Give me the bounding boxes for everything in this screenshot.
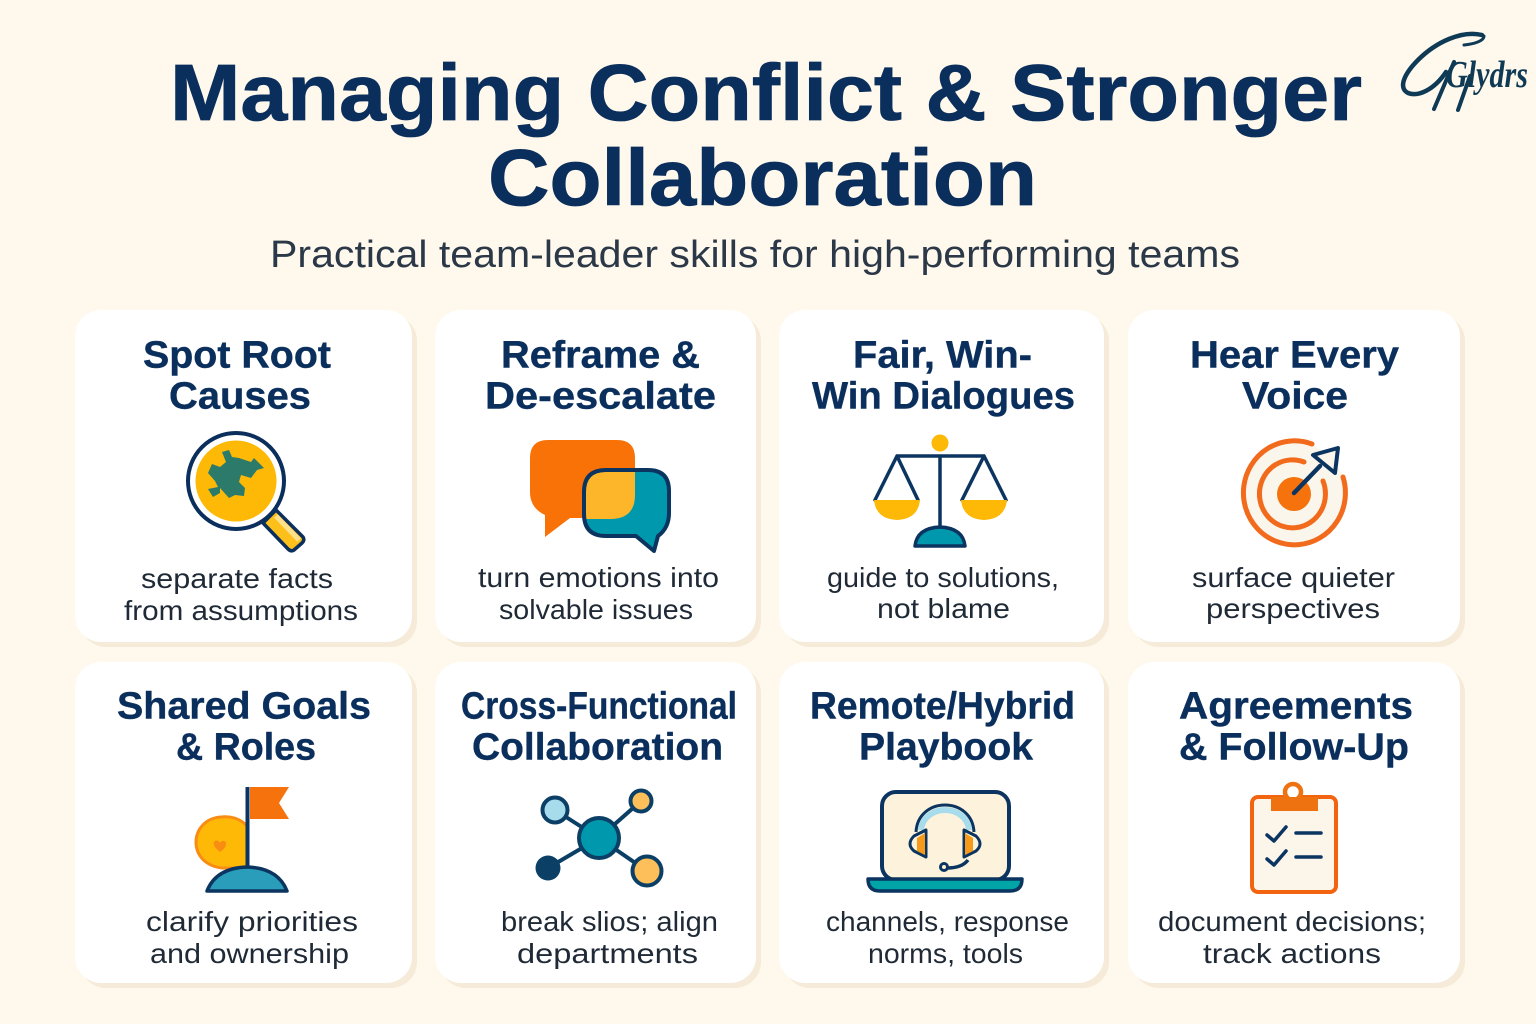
- heading: & Roles: [176, 726, 316, 768]
- heading: Causes: [169, 376, 311, 418]
- heading: [812, 334, 1075, 418]
- icon: overlapping speech bubbles: [530, 440, 669, 551]
- heading: Cross-Functional: [461, 686, 737, 728]
- description: perspectives: [1206, 593, 1380, 624]
- panel: Fair, Win-Win Dialogues: [779, 310, 1109, 647]
- description: surface quieter: [1192, 562, 1395, 593]
- title: Managing Conflict & Stronger: [170, 48, 1362, 137]
- heading: Hear Every: [1190, 334, 1399, 376]
- icon: target with arrow: [1242, 441, 1346, 546]
- heading: Playbook: [859, 726, 1034, 768]
- description: document decisions;: [1158, 906, 1426, 937]
- heading: Shared Goals: [117, 686, 371, 728]
- heading: [810, 686, 1075, 768]
- description: channels, response: [826, 906, 1069, 937]
- heading: Voice: [1242, 376, 1348, 418]
- description: solvable issues: [499, 594, 693, 625]
- heading: [143, 334, 331, 418]
- heading: & Follow-Up: [1179, 726, 1409, 768]
- description: track actions: [1203, 938, 1381, 969]
- description: [501, 906, 718, 969]
- description: [1192, 562, 1395, 624]
- heading: [1190, 334, 1399, 418]
- description: break slios; align: [501, 906, 718, 937]
- card background: [1128, 662, 1460, 983]
- panel: Agreements & Follow-Up: [1128, 662, 1465, 988]
- heading: Win Dialogues: [812, 376, 1075, 418]
- logo: Glydrs: [1403, 34, 1528, 110]
- card background: [75, 662, 412, 983]
- card background: [779, 662, 1104, 983]
- description: [146, 906, 358, 969]
- description: guide to solutions,: [827, 562, 1059, 593]
- panel: Hear Every Voice: [1128, 310, 1465, 647]
- description: and ownership: [150, 938, 349, 969]
- card background: [779, 310, 1104, 642]
- description: not blame: [877, 593, 1010, 624]
- icon: clipboard checklist: [1252, 784, 1336, 892]
- card background: [435, 662, 756, 983]
- description: norms, tools: [868, 938, 1023, 969]
- heading: Fair, Win-: [853, 334, 1032, 376]
- card background: [435, 310, 756, 642]
- heading: Remote/Hybrid: [810, 686, 1075, 728]
- icon: magnifying glass with puzzle piece: [188, 433, 304, 551]
- card background: [1128, 310, 1460, 642]
- heading: [485, 334, 716, 418]
- panel: Reframe & De-escalate: [435, 310, 761, 647]
- description: [1158, 906, 1426, 969]
- description: turn emotions into: [478, 562, 719, 593]
- heading: [1179, 686, 1413, 768]
- description: [124, 563, 358, 626]
- icon: flag on mound with coin: [196, 787, 289, 891]
- title: Collaboration: [488, 133, 1037, 222]
- panel: Cross-Functional Collaboration: [435, 662, 761, 988]
- description: [826, 906, 1069, 969]
- description: departments: [517, 938, 698, 969]
- heading: Reframe &: [501, 334, 700, 376]
- description: separate facts: [141, 563, 333, 594]
- icon: balance scales: [874, 434, 1007, 546]
- subtitle: Practical team-leader skills for high-performing teams: [270, 234, 1240, 276]
- card background: [75, 310, 412, 642]
- icon: network of nodes: [536, 790, 662, 886]
- panel: Remote/Hybrid Playbook: [779, 662, 1109, 988]
- description: clarify priorities: [146, 906, 358, 937]
- heading: Agreements: [1179, 686, 1413, 728]
- heading: [461, 686, 737, 768]
- title: [170, 48, 1362, 222]
- heading: Spot Root: [143, 334, 331, 376]
- description: [827, 562, 1059, 624]
- icon: laptop with headset: [868, 792, 1022, 891]
- heading: Collaboration: [472, 726, 723, 768]
- description: from assumptions: [124, 595, 358, 626]
- heading: [117, 686, 371, 768]
- description: [478, 562, 719, 625]
- panel: Spot Root Causes: [75, 310, 417, 647]
- panel: Shared Goals & Roles: [75, 662, 417, 988]
- heading: De-escalate: [485, 376, 716, 418]
